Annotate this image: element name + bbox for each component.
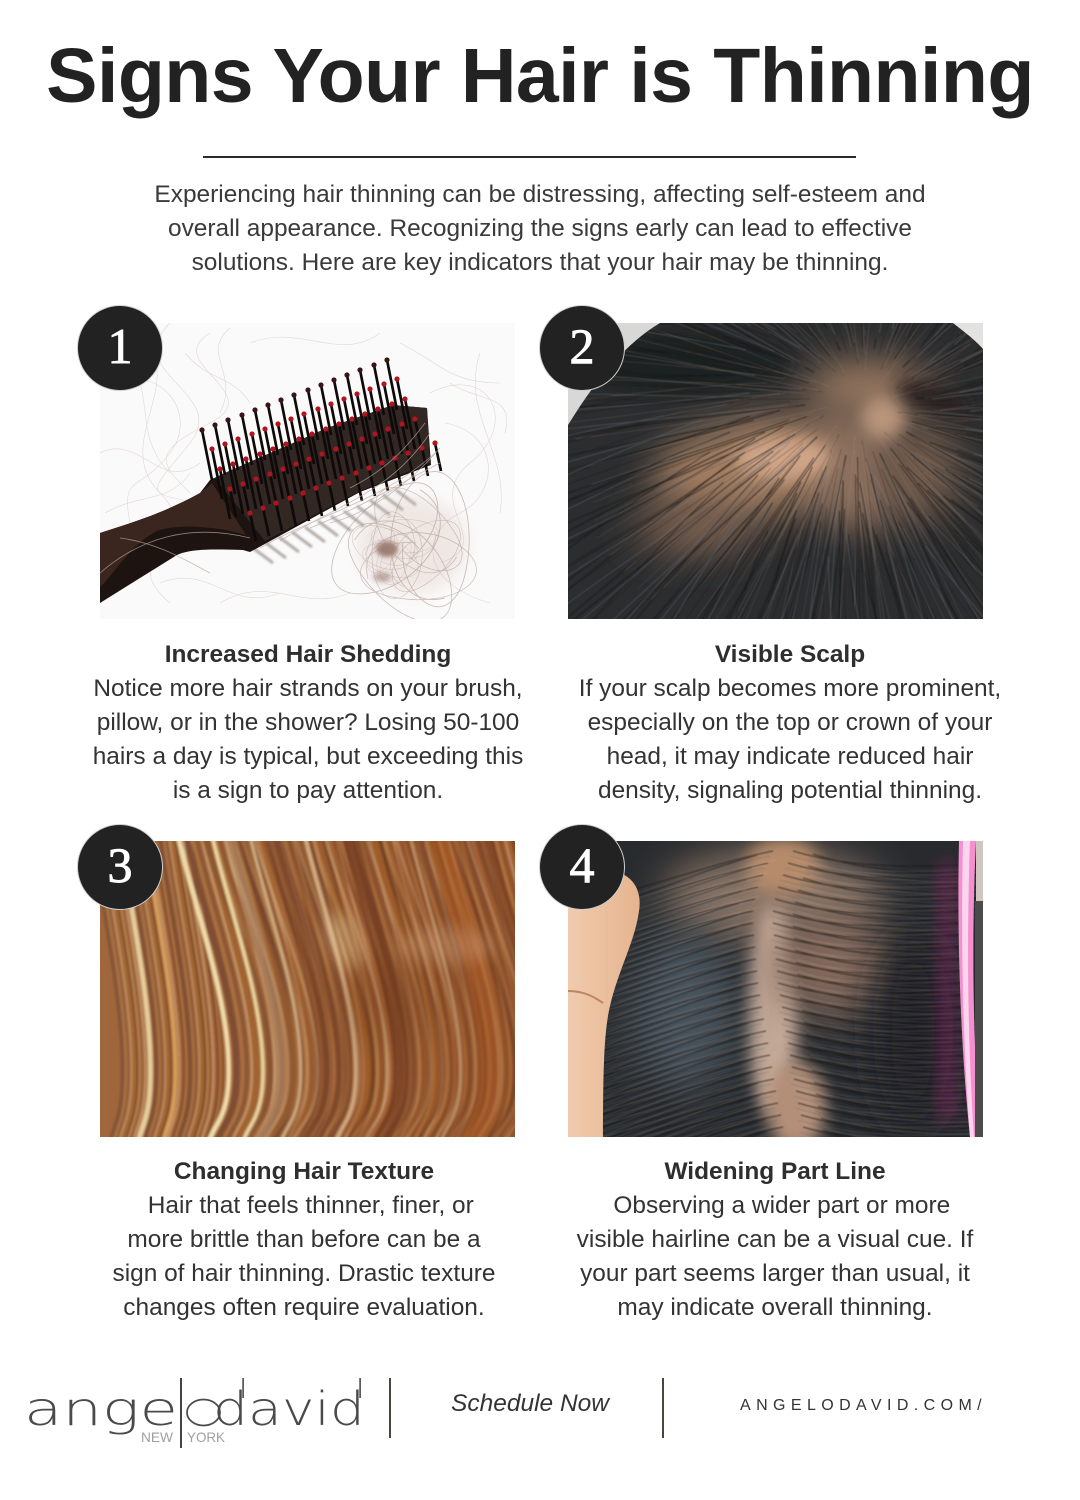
intro paragraph: solutions. Here are key indicators that your hair may be thinning. <box>192 249 888 276</box>
divider left <box>389 1378 391 1438</box>
logo: angelo david new york: ange <box>24 1382 178 1436</box>
photo 3: changing hair texture <box>100 841 515 1137</box>
badge 1: 1 <box>108 318 132 374</box>
text: increased hair shedding: is a sign to pay attention. <box>173 777 443 804</box>
text: increased hair shedding: Notice more hair strands on your brush, <box>93 675 523 702</box>
text: widening part line: visible hairline can be a visual cue. If <box>577 1226 973 1253</box>
intro paragraph: Experiencing hair thinning can be distressing, affecting self-esteem and <box>154 181 926 208</box>
text: visible scalp: especially on the top or crown of your <box>588 709 992 736</box>
intro paragraph <box>154 181 926 276</box>
badge 1 <box>77 305 163 391</box>
text: widening part line: Observing a wider part or more <box>613 1192 950 1219</box>
text: visible scalp <box>579 641 1001 804</box>
text: changing hair texture <box>112 1158 496 1321</box>
text: visible scalp: Visible Scalp <box>715 641 865 668</box>
text: changing hair texture: sign of hair thinning. Drastic texture <box>112 1260 496 1287</box>
text: widening part line: may indicate overall thinning. <box>617 1294 933 1321</box>
text: widening part line: Widening Part Line <box>664 1158 886 1185</box>
logo: angelo david new york: NEW <box>141 1429 174 1445</box>
text: increased hair shedding: pillow, or in the shower? Losing 50-100 <box>97 709 519 736</box>
badge 3: 3 <box>108 837 132 893</box>
schedule now link: Schedule Now <box>451 1390 609 1417</box>
badge 2 <box>539 305 625 391</box>
text: changing hair texture: changes often require evaluation. <box>123 1294 485 1321</box>
logo: angelo david new york <box>24 1378 365 1448</box>
photo 4: widening part line <box>568 841 983 1137</box>
divider right <box>662 1378 664 1438</box>
photo 1: hair brush with shed hair <box>100 323 507 619</box>
intro paragraph: overall appearance. Recognizing the signs early can lead to effective <box>168 215 912 242</box>
logo: angelo david new york: david <box>213 1382 365 1436</box>
photo 2: visible scalp <box>568 323 983 619</box>
text: visible scalp: head, it may indicate reduced hair <box>607 743 973 770</box>
badge 4 <box>539 824 625 910</box>
text: increased hair shedding: hairs a day is typical, but exceeding this <box>93 743 523 770</box>
text: widening part line: your part seems larger than usual, it <box>580 1260 970 1287</box>
title underline <box>203 156 856 158</box>
website url: ANGELODAVID.COM/ <box>740 1397 987 1414</box>
text: visible scalp: If your scalp becomes more prominent, <box>579 675 1001 702</box>
text: changing hair texture: Hair that feels thinner, finer, or <box>148 1192 474 1219</box>
title: Signs Your Hair is Thinning <box>46 33 1034 119</box>
text: widening part line <box>576 1158 974 1321</box>
text: increased hair shedding <box>93 641 523 804</box>
text: visible scalp: density, signaling potential thinning. <box>598 777 982 804</box>
text: increased hair shedding: Increased Hair Shedding <box>165 641 451 668</box>
badge 4: 4 <box>570 837 594 893</box>
badge 3 <box>77 824 163 910</box>
badge 2: 2 <box>570 318 594 374</box>
logo: angelo david new york: YORK <box>187 1429 226 1445</box>
text: changing hair texture: Changing Hair Texture <box>174 1158 434 1185</box>
text: changing hair texture: more brittle than before can be a <box>127 1226 481 1253</box>
